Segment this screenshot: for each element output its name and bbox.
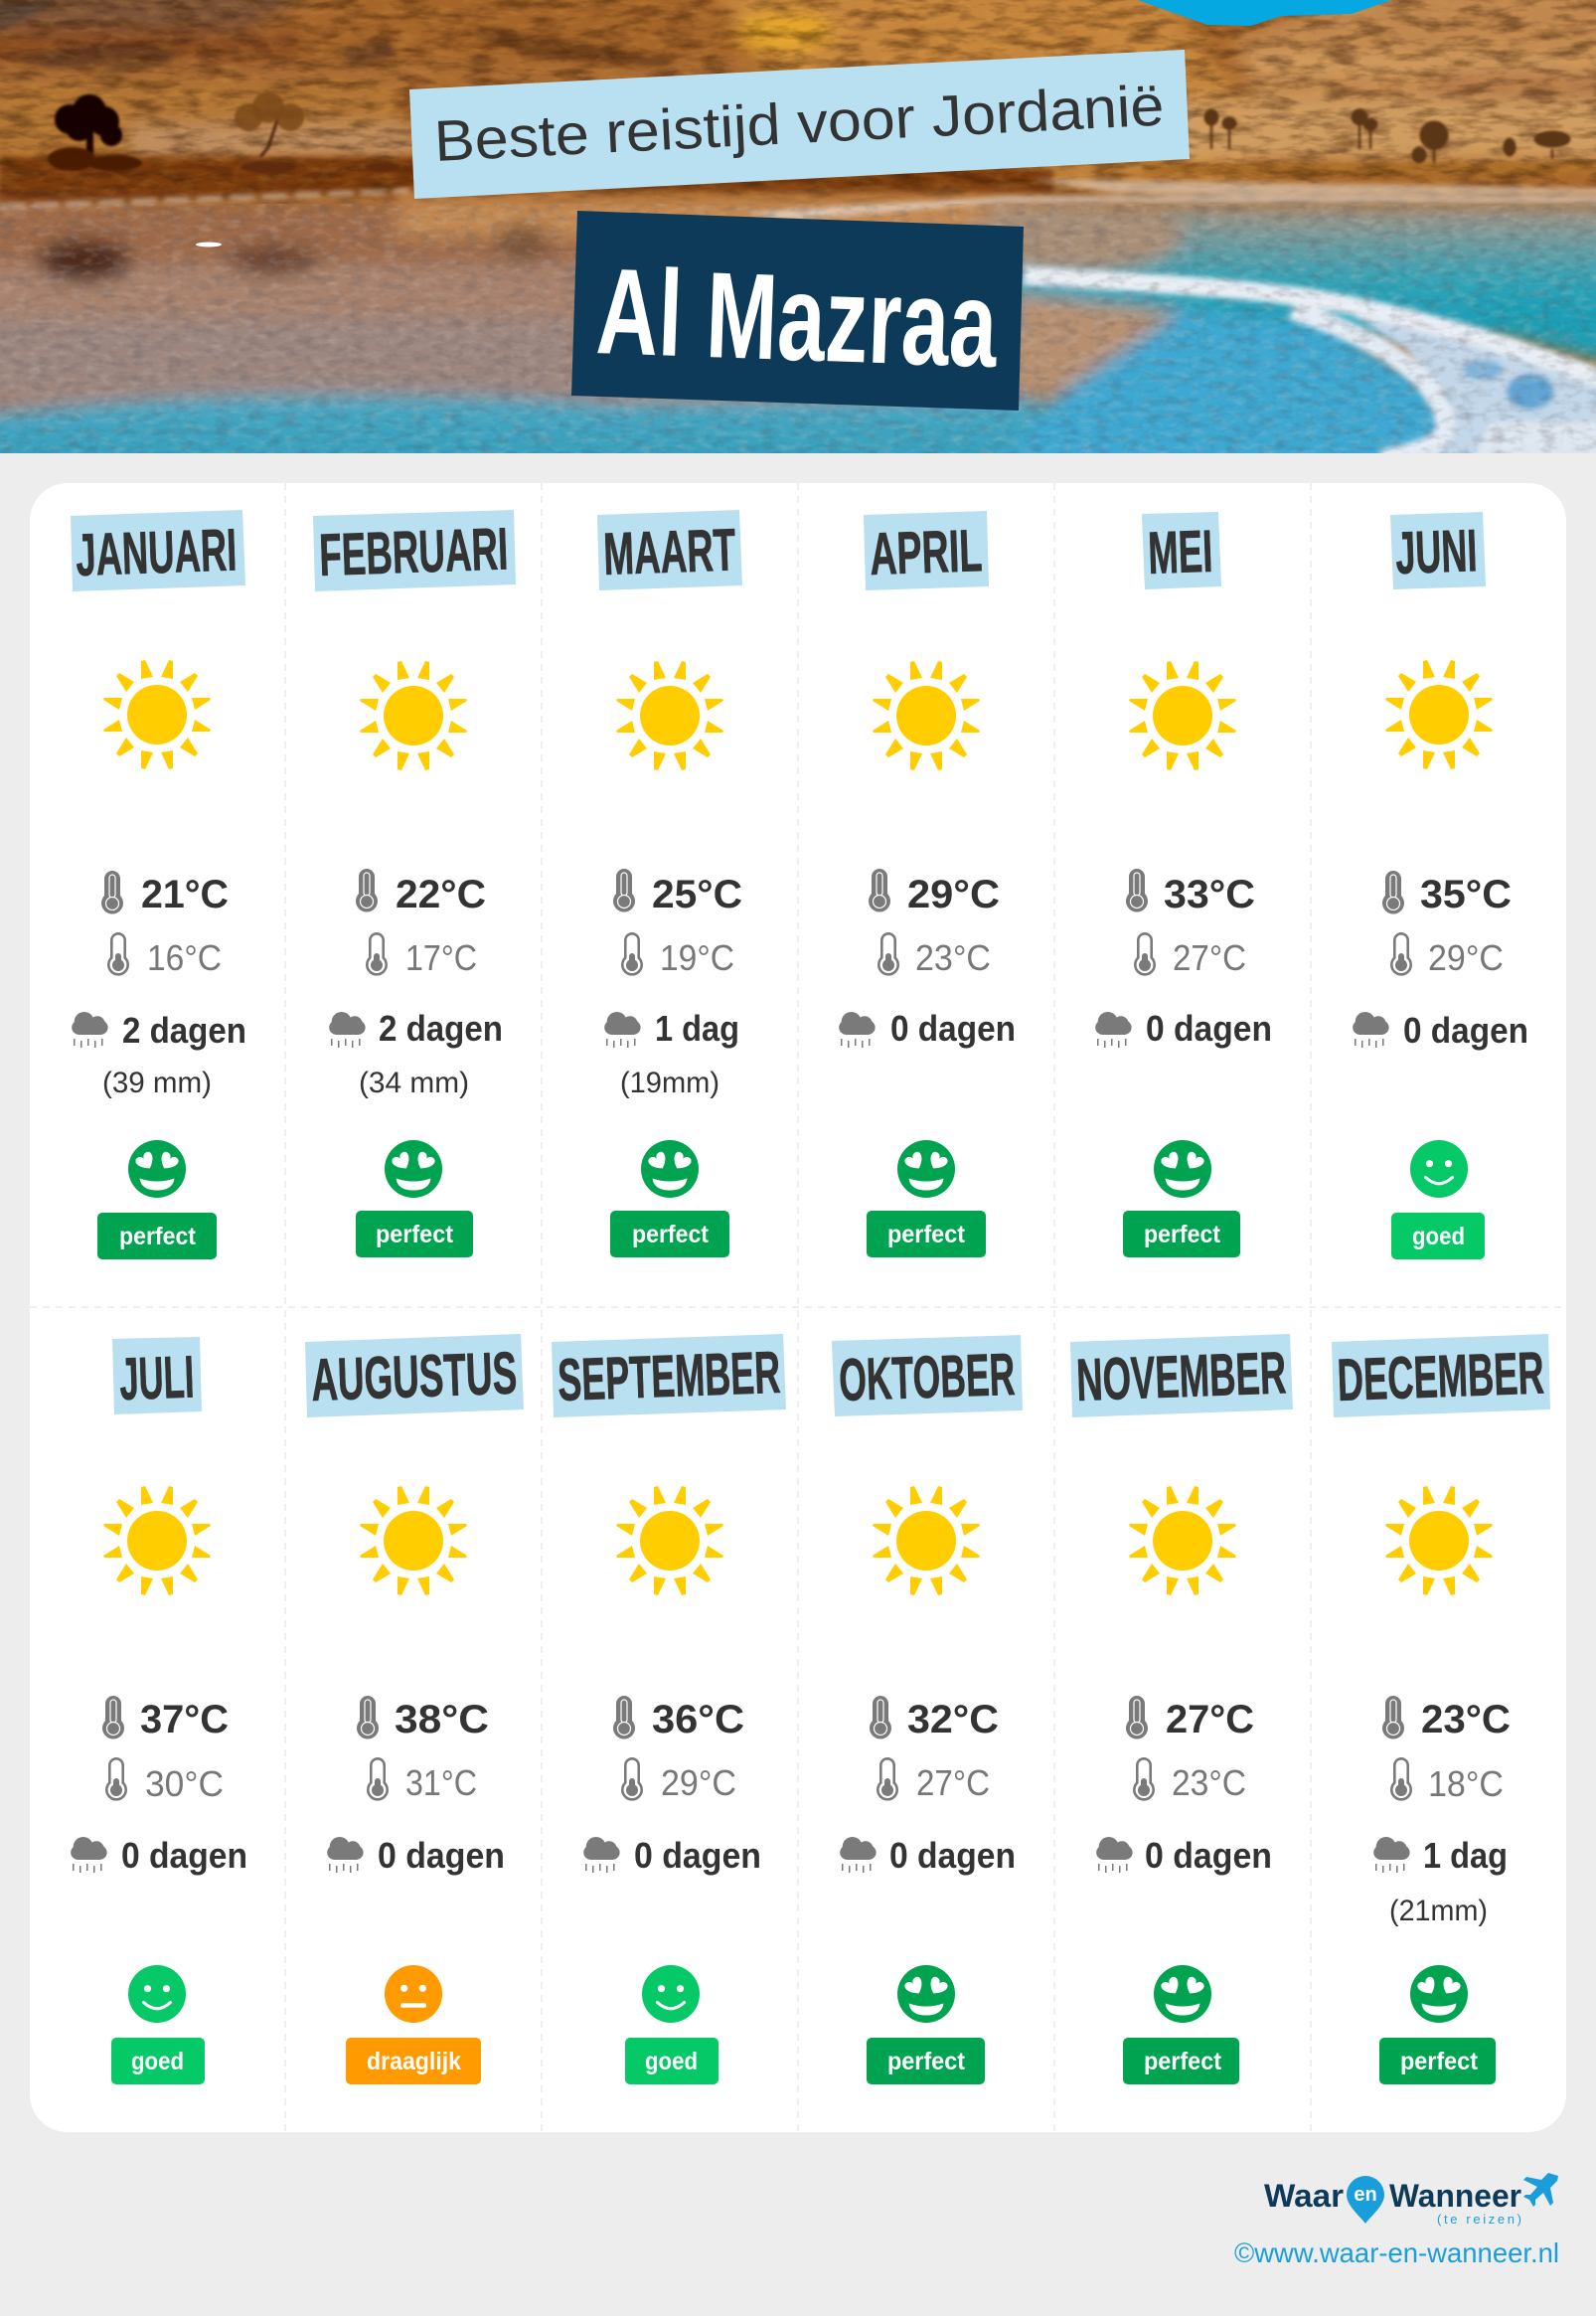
badge: goed: goed [1412, 1223, 1465, 1250]
heading: november [1070, 1334, 1293, 1417]
badge: perfect: perfect [887, 1221, 966, 1248]
badge: perfect [1379, 2038, 1496, 2084]
badge: perfect [867, 1211, 986, 1257]
badge: draaglijk: draaglijk [367, 2048, 461, 2075]
max temperature: 23°C [1421, 1698, 1511, 1741]
badge: perfect [97, 1213, 217, 1259]
min temperature [1134, 1758, 1246, 1803]
badge: perfect: perfect [376, 1221, 454, 1248]
heading: januari: JANUARI [75, 516, 238, 588]
rain days [583, 1835, 761, 1876]
icon: sun [103, 660, 211, 769]
heading: februari: FEBRUARI [318, 515, 509, 588]
source url: ©www.waar-en-wanneer.nl [1234, 2237, 1559, 2268]
rain days: 1 dag [655, 1008, 739, 1049]
badge: perfect [610, 1211, 729, 1257]
month: november [1070, 1334, 1293, 2084]
heading: augustus [305, 1334, 524, 1417]
rain days [71, 1835, 247, 1876]
logo: Waar en Wanneer: Waar [1264, 2178, 1344, 2214]
month: juni [1353, 512, 1528, 1259]
max temperature [357, 1696, 489, 1741]
min temperature: 16°C [147, 937, 222, 978]
badge: goed [111, 2038, 205, 2084]
month: juli [71, 1337, 247, 2084]
min temperature [1391, 933, 1504, 978]
icon: sun [1385, 660, 1493, 769]
icon: sun [616, 1486, 723, 1595]
max temperature: 25°C [652, 873, 742, 916]
badge: perfect: perfect [1400, 2048, 1479, 2075]
min temperature [367, 933, 477, 978]
heading: september: SEPTEMBER [557, 1339, 781, 1413]
max temperature: 29°C [907, 873, 1000, 916]
water [0, 199, 1596, 483]
icon: sun [360, 661, 467, 770]
title banner: Beste reistijd voor Jordanië: Beste reistijd voor Jordanië [432, 74, 1166, 174]
min temperature [1135, 933, 1246, 978]
rain days [1095, 1008, 1272, 1049]
icon: smiley perfect [128, 1140, 186, 1198]
month: december [1332, 1334, 1550, 2084]
min temperature [108, 933, 222, 978]
heading: juni: JUNI [1394, 517, 1478, 586]
max temperature [613, 1696, 744, 1741]
heading: oktober: OKTOBER [838, 1341, 1016, 1413]
rain days [1353, 1010, 1528, 1051]
rain days [1096, 1835, 1272, 1876]
icon: sun [1129, 1486, 1236, 1595]
icon: sun [360, 1486, 467, 1595]
heading: mei [1142, 512, 1221, 589]
icon: smiley draaglijk [385, 1965, 442, 2023]
badge: perfect: perfect [1144, 2048, 1222, 2075]
badge: perfect: perfect [887, 2048, 966, 2075]
logo: Waar en Wanneer: (te reizen) [1437, 2212, 1521, 2227]
rain days [839, 1008, 1016, 1049]
min temperature [878, 933, 991, 978]
rain days: 1 dag [1423, 1835, 1508, 1876]
max temperature [356, 869, 486, 916]
rain days: 0 dagen [378, 1835, 505, 1876]
badge: goed [625, 2038, 718, 2084]
min temperature [106, 1758, 224, 1804]
badge: perfect: perfect [1144, 1221, 1221, 1248]
header photo: Dead Sea landscape [0, 0, 1596, 487]
rain days: 0 dagen [121, 1835, 247, 1876]
icon: sun [873, 661, 980, 770]
min temperature [1391, 1758, 1504, 1804]
heading: september [552, 1334, 786, 1417]
heading: februari [313, 510, 516, 591]
heading: januari [71, 510, 245, 591]
badge: perfect: perfect [119, 1223, 197, 1250]
rain days: 0 dagen [889, 1835, 1016, 1876]
rain days [840, 1835, 1016, 1876]
rainfall amount: (39 mm) [102, 1067, 212, 1099]
rain days: 2 dagen [122, 1010, 246, 1051]
month: september [552, 1334, 786, 2084]
badge: draaglijk [346, 2038, 481, 2084]
badge: goed [1391, 1213, 1485, 1259]
heading: juli: JULI [118, 1343, 195, 1412]
heading: maart [597, 510, 742, 590]
location banner: Al Mazraa: Al Mazraa [594, 244, 1001, 394]
month: januari [71, 510, 246, 1259]
min temperature: 29°C [1428, 937, 1504, 978]
rain days [329, 1008, 503, 1049]
icon: airplane [1523, 2173, 1558, 2207]
icon: smiley perfect [1154, 1140, 1211, 1198]
rain days [1373, 1835, 1508, 1876]
icon: smiley perfect [641, 1140, 699, 1198]
rippled water texture [0, 204, 1596, 453]
icon: smiley perfect [897, 1965, 955, 2023]
badge: perfect [356, 1211, 473, 1257]
max temperature: 32°C [907, 1698, 999, 1741]
min temperature: 23°C [1172, 1762, 1246, 1803]
max temperature [102, 1696, 229, 1741]
month: april [839, 511, 1016, 1257]
rainfall amount: (21mm) [1389, 1895, 1488, 1927]
badge: goed: goed [645, 2048, 698, 2075]
max temperature: 27°C [1166, 1698, 1254, 1741]
icon: sun [1129, 661, 1236, 770]
icon: map pin: en [1354, 2184, 1377, 2206]
heading: oktober [832, 1335, 1023, 1416]
panel: month card [30, 483, 1566, 2132]
min temperature: 29°C [661, 1762, 736, 1803]
rain days: 0 dagen [1403, 1010, 1528, 1051]
max temperature: 35°C [1420, 873, 1512, 916]
trees left [48, 91, 400, 173]
sky [1138, 0, 1391, 26]
month: mei [1095, 512, 1272, 1257]
icon: sun [616, 661, 723, 770]
month: maart [597, 510, 742, 1257]
title banner: Beste reistijd voor Jordanië [409, 50, 1190, 199]
heading: november: NOVEMBER [1075, 1339, 1287, 1413]
min temperature: 23°C [915, 937, 991, 978]
badge: perfect [1123, 2038, 1239, 2084]
rain days: 2 dagen [379, 1008, 503, 1049]
month: februari [313, 510, 516, 1257]
rain days: 0 dagen [890, 1008, 1016, 1049]
min temperature: 31°C [405, 1762, 477, 1803]
icon: sun [873, 1486, 980, 1595]
icon: smiley perfect [385, 1140, 442, 1198]
logo: Waar en Wanneer [1264, 2173, 1558, 2227]
icon: smiley perfect [897, 1140, 955, 1198]
min temperature: 27°C [916, 1762, 990, 1803]
rain days: 0 dagen [1145, 1835, 1272, 1876]
max temperature: 36°C [652, 1698, 744, 1741]
icon: sun [103, 1486, 211, 1595]
rainfall amount: (34 mm) [359, 1067, 469, 1099]
heading: juli [112, 1337, 202, 1414]
min temperature: 27°C [1173, 937, 1246, 978]
max temperature: 33°C [1164, 873, 1255, 916]
min temperature: 19°C [660, 937, 734, 978]
rain days [72, 1010, 246, 1051]
location banner: Al Mazraa [571, 211, 1024, 411]
max temperature [870, 1696, 999, 1741]
max temperature: 37°C [140, 1698, 229, 1741]
badge: perfect [1123, 1211, 1240, 1257]
heading: augustus: AUGUSTUS [310, 1339, 518, 1413]
heading: mei: MEI [1147, 518, 1213, 586]
rain days: 0 dagen [1146, 1008, 1272, 1049]
min temperature [878, 1758, 990, 1803]
badge: perfect: perfect [632, 1221, 710, 1248]
min temperature [368, 1758, 477, 1803]
icon: smiley goed [1410, 1140, 1468, 1198]
max temperature [1382, 871, 1512, 916]
min temperature: 30°C [145, 1763, 224, 1804]
icon: sun [1385, 1486, 1493, 1595]
max temperature [1382, 1696, 1511, 1741]
rainfall amount: (19mm) [620, 1067, 719, 1099]
max temperature: 38°C [395, 1698, 489, 1741]
logo: Waar en Wanneer: Wanneer [1389, 2178, 1521, 2214]
rain days: 0 dagen [634, 1835, 761, 1876]
min temperature [622, 933, 734, 978]
max temperature [1126, 1696, 1254, 1741]
salt crust [0, 179, 1596, 487]
max temperature [101, 871, 229, 916]
icon: smiley goed [642, 1965, 700, 2023]
heading: april [864, 511, 989, 590]
rain days [604, 1008, 739, 1049]
max temperature [1126, 869, 1255, 916]
icon: smiley perfect [1154, 1965, 1211, 2023]
month: oktober [832, 1335, 1023, 2084]
icon: smiley goed [128, 1965, 186, 2023]
palms right [1204, 109, 1570, 163]
max temperature: 21°C [141, 873, 229, 916]
icon: smiley perfect [1410, 1965, 1468, 2023]
max temperature [869, 869, 1000, 916]
heading: april: APRIL [869, 517, 983, 587]
min temperature: 18°C [1428, 1763, 1504, 1804]
heading: juni [1390, 512, 1486, 589]
badge: goed: goed [131, 2048, 184, 2075]
icon: map pin [1347, 2176, 1384, 2224]
badge: perfect [867, 2038, 985, 2084]
min temperature [622, 1758, 736, 1803]
max temperature [613, 869, 742, 916]
min temperature: 17°C [405, 937, 477, 978]
heading: maart: MAART [602, 516, 736, 587]
max temperature: 22°C [396, 873, 486, 916]
rain days [327, 1835, 505, 1876]
month: augustus [305, 1334, 524, 2084]
